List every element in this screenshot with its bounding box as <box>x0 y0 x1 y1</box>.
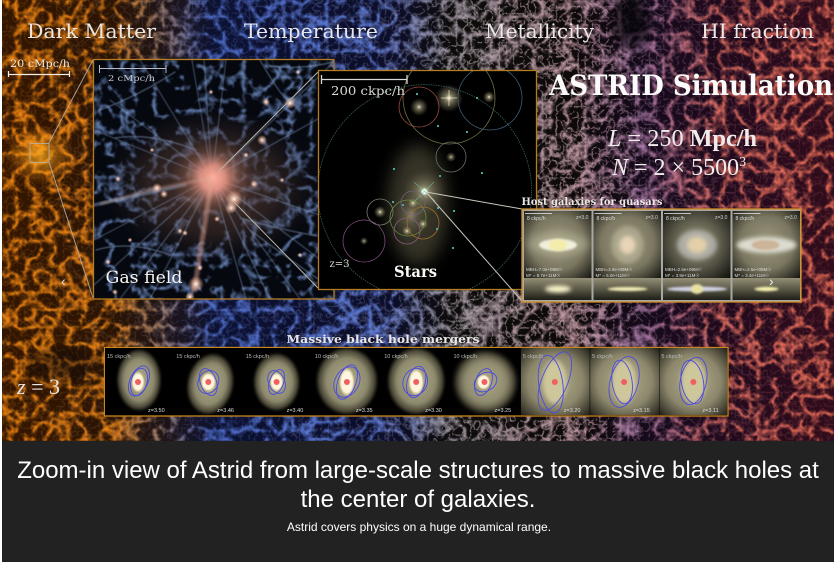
merger frame z=3.15: z=3.15 <box>633 408 650 414</box>
heading: Metallicity: Metallicity <box>485 19 595 43</box>
merger frame z=3.20: 5 ckpc/h <box>523 354 543 360</box>
host galaxy 3: 8 ckpc/h <box>666 216 685 222</box>
stars panel border <box>318 70 536 290</box>
filaments <box>94 60 334 299</box>
scale bar: 2 cMpc/h <box>100 65 166 84</box>
host galaxy 2: z=3.0 <box>646 215 658 221</box>
merger frame z=3.46: 15 ckpc/h <box>176 354 200 360</box>
host galaxy 2 <box>594 211 661 300</box>
merger frame z=3.50: z=3.50 <box>148 408 165 414</box>
host galaxy 1: MBH=7.0e+09M☉ <box>526 267 564 272</box>
scale bar: 20 cMpc/h: 20 cMpc/h <box>10 59 71 70</box>
host galaxy 2: M* = 5.0e+11M☉ <box>596 273 631 278</box>
merger frame z=3.30: 10 ckpc/h <box>384 354 408 360</box>
merger frame z=3.25: z=3.25 <box>494 408 511 414</box>
merger frame z=3.40 <box>244 348 312 414</box>
scale bar: 2 cMpc/h: 2 cMpc/h <box>108 74 156 84</box>
label: z=3: z=3 <box>330 259 350 270</box>
host galaxy 3: z=3.0 <box>715 215 728 221</box>
merger frame z=3.15: 5 ckpc/h <box>592 354 613 360</box>
host galaxy 4: M* = 3.4e+11M☉ <box>734 273 770 278</box>
merger frame z=3.50: 15 ckpc/h <box>107 354 131 360</box>
merger frame z=3.30: z=3.30 <box>425 408 442 414</box>
gas panel border <box>94 60 334 299</box>
heading: HI fraction: HI fraction <box>701 19 814 43</box>
merger frame z=3.50 <box>105 348 174 415</box>
formula: box size: L = 250 Mpc/h <box>607 126 757 152</box>
background: cosmic web across four fields <box>2 0 834 441</box>
slider arrow: next: › <box>769 273 774 289</box>
host galaxy 1: 8 ckpc/h <box>527 216 546 222</box>
scale bar: 200 ckpc/h <box>322 75 407 98</box>
core glow <box>176 142 250 212</box>
merger frame z=3.35: z=3.35 <box>356 408 373 414</box>
caption panel <box>2 441 834 562</box>
caption headline: the center of galaxies. <box>301 486 535 513</box>
heading: Host galaxies for quasars: Host galaxies for quasars <box>522 197 663 208</box>
host galaxy 3: M* = 3.9e+11M☉ <box>665 273 700 278</box>
host galaxy 3: MBH=2.6e+09M☉ <box>665 267 703 272</box>
halo circles <box>319 71 532 289</box>
bright nodes <box>226 190 242 208</box>
heading: Massive black hole mergers: Massive black hole mergers <box>286 332 480 346</box>
merger frame z=3.46: z=3.46 <box>217 408 234 414</box>
zoom marker: square and connector lines to gas panel <box>30 60 93 298</box>
star clumps <box>436 85 462 111</box>
merger frame z=3.15 <box>590 348 659 415</box>
panel: host galaxies <box>522 209 801 302</box>
label: Gas field: Gas field <box>106 268 183 288</box>
caption subtext: Astrid covers physics on a huge dynamical range. <box>287 520 551 534</box>
host galaxy 4 <box>732 211 800 300</box>
merger frame z=3.20 <box>520 348 590 415</box>
merger frame z=3.35 <box>313 348 382 415</box>
host galaxy 4: 8 ckpc/h <box>736 216 754 222</box>
host galaxy 1 <box>524 211 592 300</box>
heading: Dark Matter: Dark Matter <box>27 19 156 43</box>
host galaxy 1: z=3.0 <box>576 215 589 221</box>
hero image: zoom-in view of the simulation <box>2 0 834 441</box>
host galaxy 2: MBH=3.9e+09M☉ <box>596 267 633 272</box>
merger frame z=3.30 <box>382 348 452 415</box>
connector lines: central galaxy to host panel <box>426 192 522 301</box>
label: Stars: Stars <box>394 262 437 281</box>
scale bar: 20 cMpc/h <box>8 59 71 77</box>
panel: black hole merger sequence <box>104 346 728 420</box>
host galaxy 4: MBH=2.5e+09M☉ <box>734 267 772 272</box>
heading: Temperature: Temperature <box>244 19 378 43</box>
formula: particle number: 3 <box>739 155 746 170</box>
host galaxy 3 <box>663 211 730 300</box>
caption headline: Zoom-in view of Astrid from large-scale structures to massive black holes at <box>17 457 819 484</box>
host galaxy 4: z=3.0 <box>784 215 797 221</box>
merger frame z=3.25: 10 ckpc/h <box>454 354 477 360</box>
merger frame z=3.35: 10 ckpc/h <box>315 354 338 360</box>
panel: gas field <box>94 60 334 302</box>
merger frame z=3.11 <box>660 348 728 415</box>
merger frame z=3.40: 15 ckpc/h <box>246 354 269 360</box>
merger frame z=3.11: z=3.11 <box>702 408 719 414</box>
merger frame z=3.46 <box>174 348 244 415</box>
merger frame z=3.11: 5 ckpc/h <box>661 354 682 360</box>
formula: particle number: N = 2 × 5500 <box>612 155 739 181</box>
diffuse stellar light <box>388 145 448 265</box>
host galaxy 2: 8 ckpc/h <box>596 216 615 222</box>
merger frame z=3.20: z=3.20 <box>564 408 580 414</box>
slider arrow: previous: ‹ <box>61 273 66 289</box>
subhalo markers <box>392 93 483 249</box>
scale bar: 200 ckpc/h: 200 ckpc/h <box>331 84 405 98</box>
label: z = 3: z = 3 <box>16 374 60 399</box>
caption headline <box>17 457 819 513</box>
host galaxy 1: M* = 8.7e+11M☉ <box>526 273 561 278</box>
panel: stars <box>319 71 536 289</box>
merger frame z=3.40: z=3.40 <box>287 408 303 414</box>
connector lines: gas core to stars panel <box>218 72 318 288</box>
merger frame z=3.25 <box>452 348 520 415</box>
